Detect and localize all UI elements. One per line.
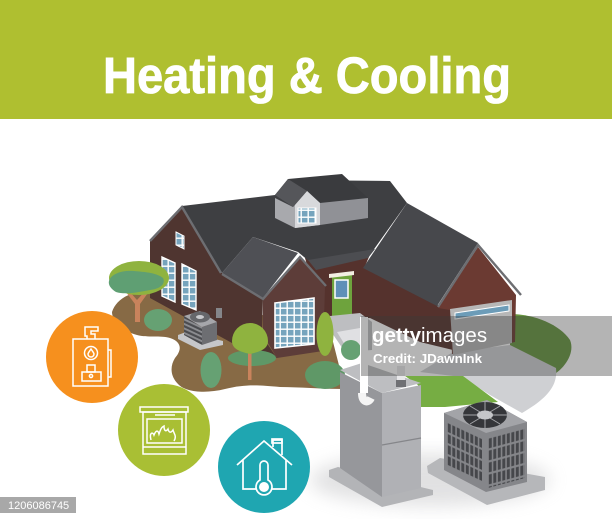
lawn behind house (510, 314, 571, 373)
furnace left face (340, 372, 382, 497)
wall: left wing (150, 207, 277, 358)
roof: main (182, 180, 407, 273)
furnace shadow (310, 454, 550, 506)
roof: right garage wing (363, 203, 478, 306)
AC pad (427, 458, 545, 505)
ground: brown garden bed (112, 290, 345, 392)
porch steps (330, 313, 372, 352)
roof: front gable (222, 237, 298, 298)
AC left grille (447, 422, 482, 482)
title band (0, 0, 612, 119)
large AC unit (427, 400, 545, 505)
watermark credit: Credit: JDawnInk (373, 351, 483, 366)
AC right grille (488, 428, 525, 488)
image id tag (0, 497, 76, 513)
watermark logo: gettyimages (372, 324, 487, 347)
furnace base (329, 467, 433, 507)
furnace right face (382, 385, 421, 497)
furnace top (340, 363, 421, 393)
icon: water heater (46, 311, 138, 403)
large furnace (310, 317, 550, 507)
trees and shrubs (109, 261, 361, 389)
AC body (444, 400, 527, 492)
top vent (396, 380, 406, 387)
AC fan (463, 402, 507, 428)
green front door (329, 271, 354, 317)
image id tag: 1206086745 (8, 500, 69, 512)
panel seam (382, 438, 421, 445)
tree: centre (228, 323, 276, 380)
title: Heating & Cooling (103, 47, 511, 104)
watermark band (361, 316, 612, 376)
garage door (450, 300, 512, 355)
house (150, 174, 521, 358)
roof: rear trim (308, 249, 375, 270)
windows: left wall (162, 232, 196, 310)
shrub: left bed (144, 309, 172, 331)
driveway (420, 345, 556, 413)
AC top (444, 400, 527, 433)
icon: fireplace (118, 384, 210, 476)
small outdoor AC unit (178, 308, 223, 350)
tree: left (109, 261, 169, 322)
wall: centre (305, 250, 453, 350)
window: front gable (275, 298, 314, 348)
dormer window (298, 208, 316, 223)
shrub: by porch (341, 340, 361, 360)
roof edges (150, 207, 521, 307)
icon: home thermometer (218, 421, 310, 513)
shrub: tall oval (200, 352, 222, 388)
flue pipe (360, 317, 368, 393)
wall: garage gable (438, 247, 516, 354)
front lawn strip (405, 376, 498, 407)
shrub: cypress (316, 312, 334, 356)
wall: front gable (263, 258, 325, 358)
shrub: low dark (305, 361, 345, 389)
dormer (275, 174, 368, 228)
